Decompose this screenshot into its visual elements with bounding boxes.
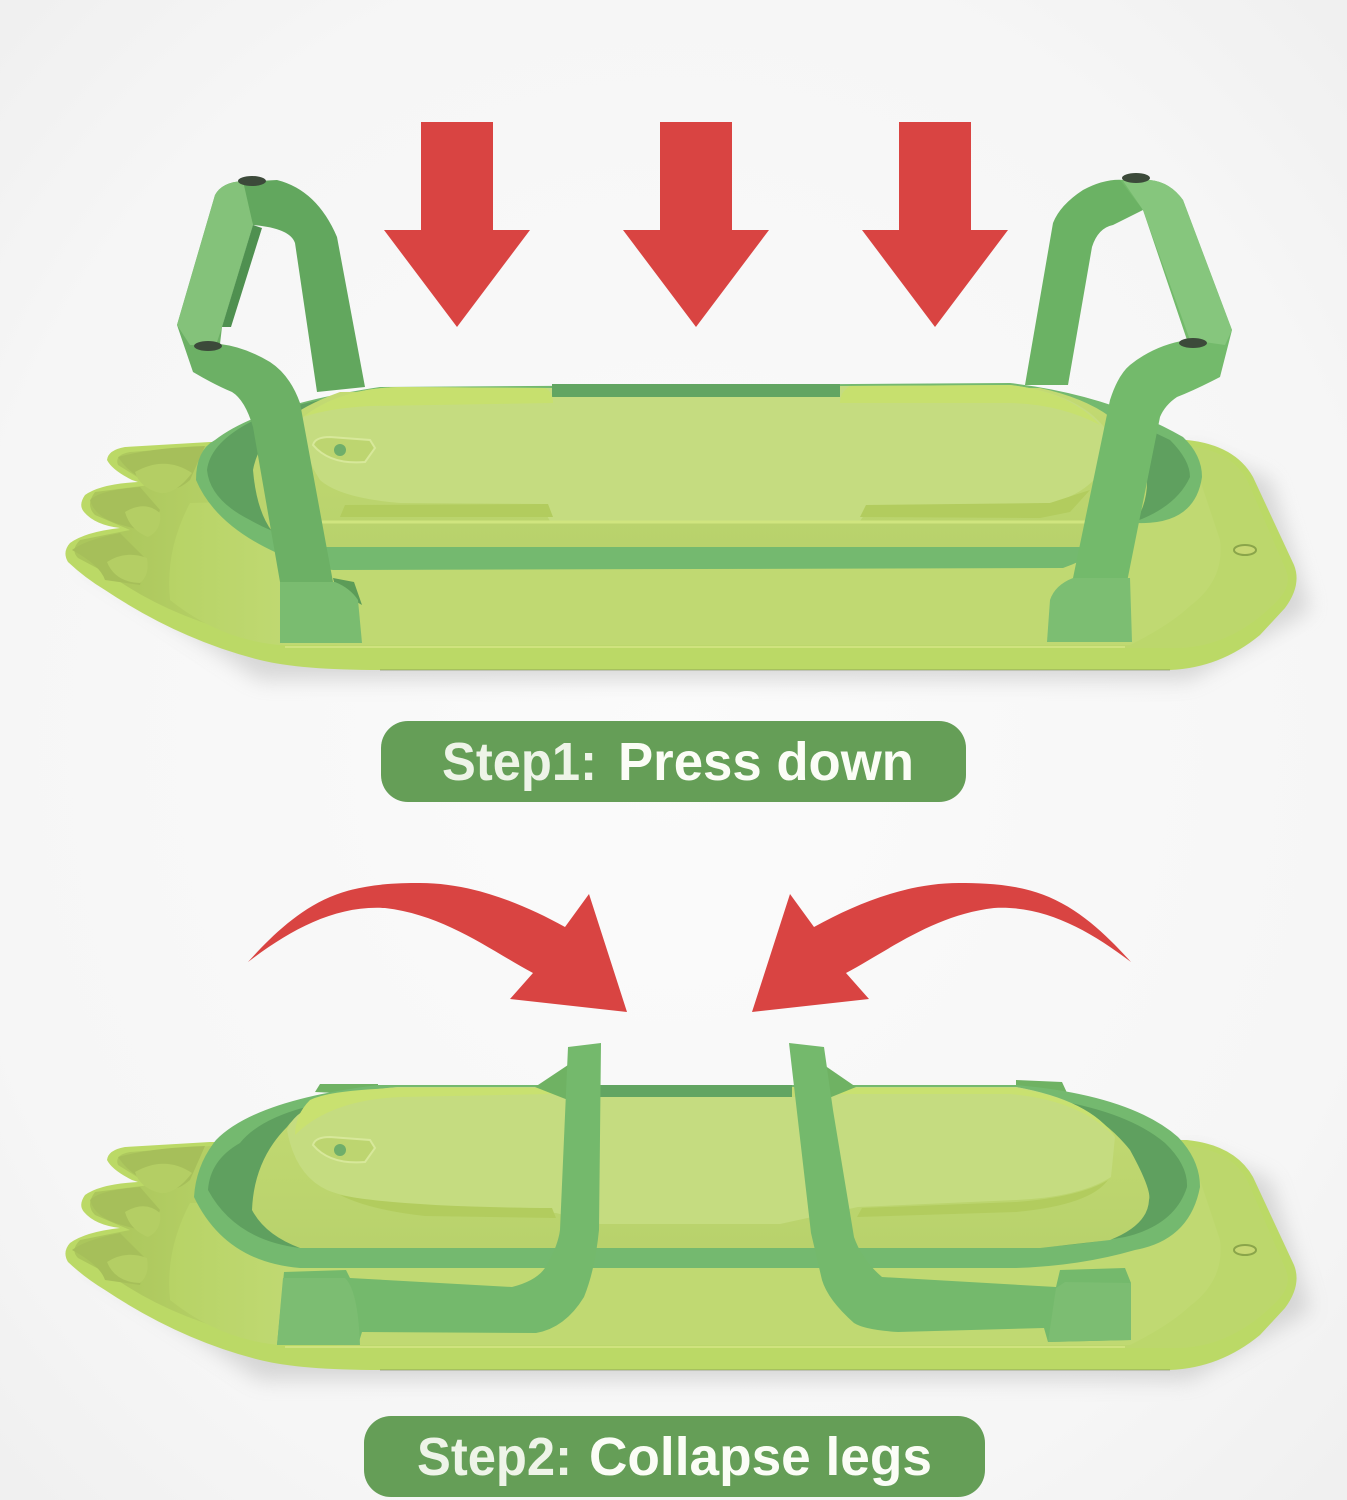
- lid tabs: [303, 385, 1100, 425]
- right back limb: [1025, 180, 1143, 385]
- lid top: [303, 385, 1112, 521]
- left folded leg: [277, 1043, 601, 1345]
- red arrow: press down centre: [623, 122, 769, 327]
- lid rim highlight: [295, 1088, 1115, 1137]
- back rim strip: [552, 384, 840, 397]
- tub inner: [207, 392, 1190, 547]
- back rim strip: [600, 1085, 792, 1097]
- left leg: [177, 176, 362, 643]
- right leg: [1047, 173, 1232, 642]
- tub rim: [196, 383, 1202, 570]
- step 2 label: Step2:: [417, 1427, 572, 1487]
- drain plug: [313, 1137, 375, 1162]
- step 1: tub with raised legs: [65, 173, 1310, 680]
- step 1 label: Press down: [618, 732, 914, 792]
- red arrow: press down right: [862, 122, 1008, 327]
- left back limb: [240, 180, 365, 392]
- right folded leg: [789, 1043, 1131, 1342]
- step 1 label: [381, 721, 966, 802]
- curved arrow left: [248, 883, 627, 1012]
- step 1 label: Step1:: [442, 732, 597, 792]
- tray base: [65, 440, 1310, 680]
- lid highlight: [300, 520, 1100, 524]
- tub rim: [194, 1085, 1200, 1268]
- lid grooves: [340, 1180, 1108, 1218]
- lid wall: [252, 1087, 1149, 1248]
- tub inner: [208, 1095, 1187, 1248]
- back tabs: [315, 1080, 1068, 1095]
- lid grooves: [340, 490, 1090, 518]
- red arrow: press down left: [384, 122, 530, 327]
- lid wall: [253, 388, 1147, 547]
- step 2 label: [364, 1416, 985, 1497]
- tray base: [65, 1140, 1310, 1380]
- curved arrow right: [752, 883, 1131, 1012]
- step 2: tub with collapsed legs: [65, 1043, 1310, 1380]
- lid top: [287, 1087, 1115, 1224]
- drain plug: [313, 437, 375, 462]
- step 2 label: Collapse legs: [589, 1427, 932, 1487]
